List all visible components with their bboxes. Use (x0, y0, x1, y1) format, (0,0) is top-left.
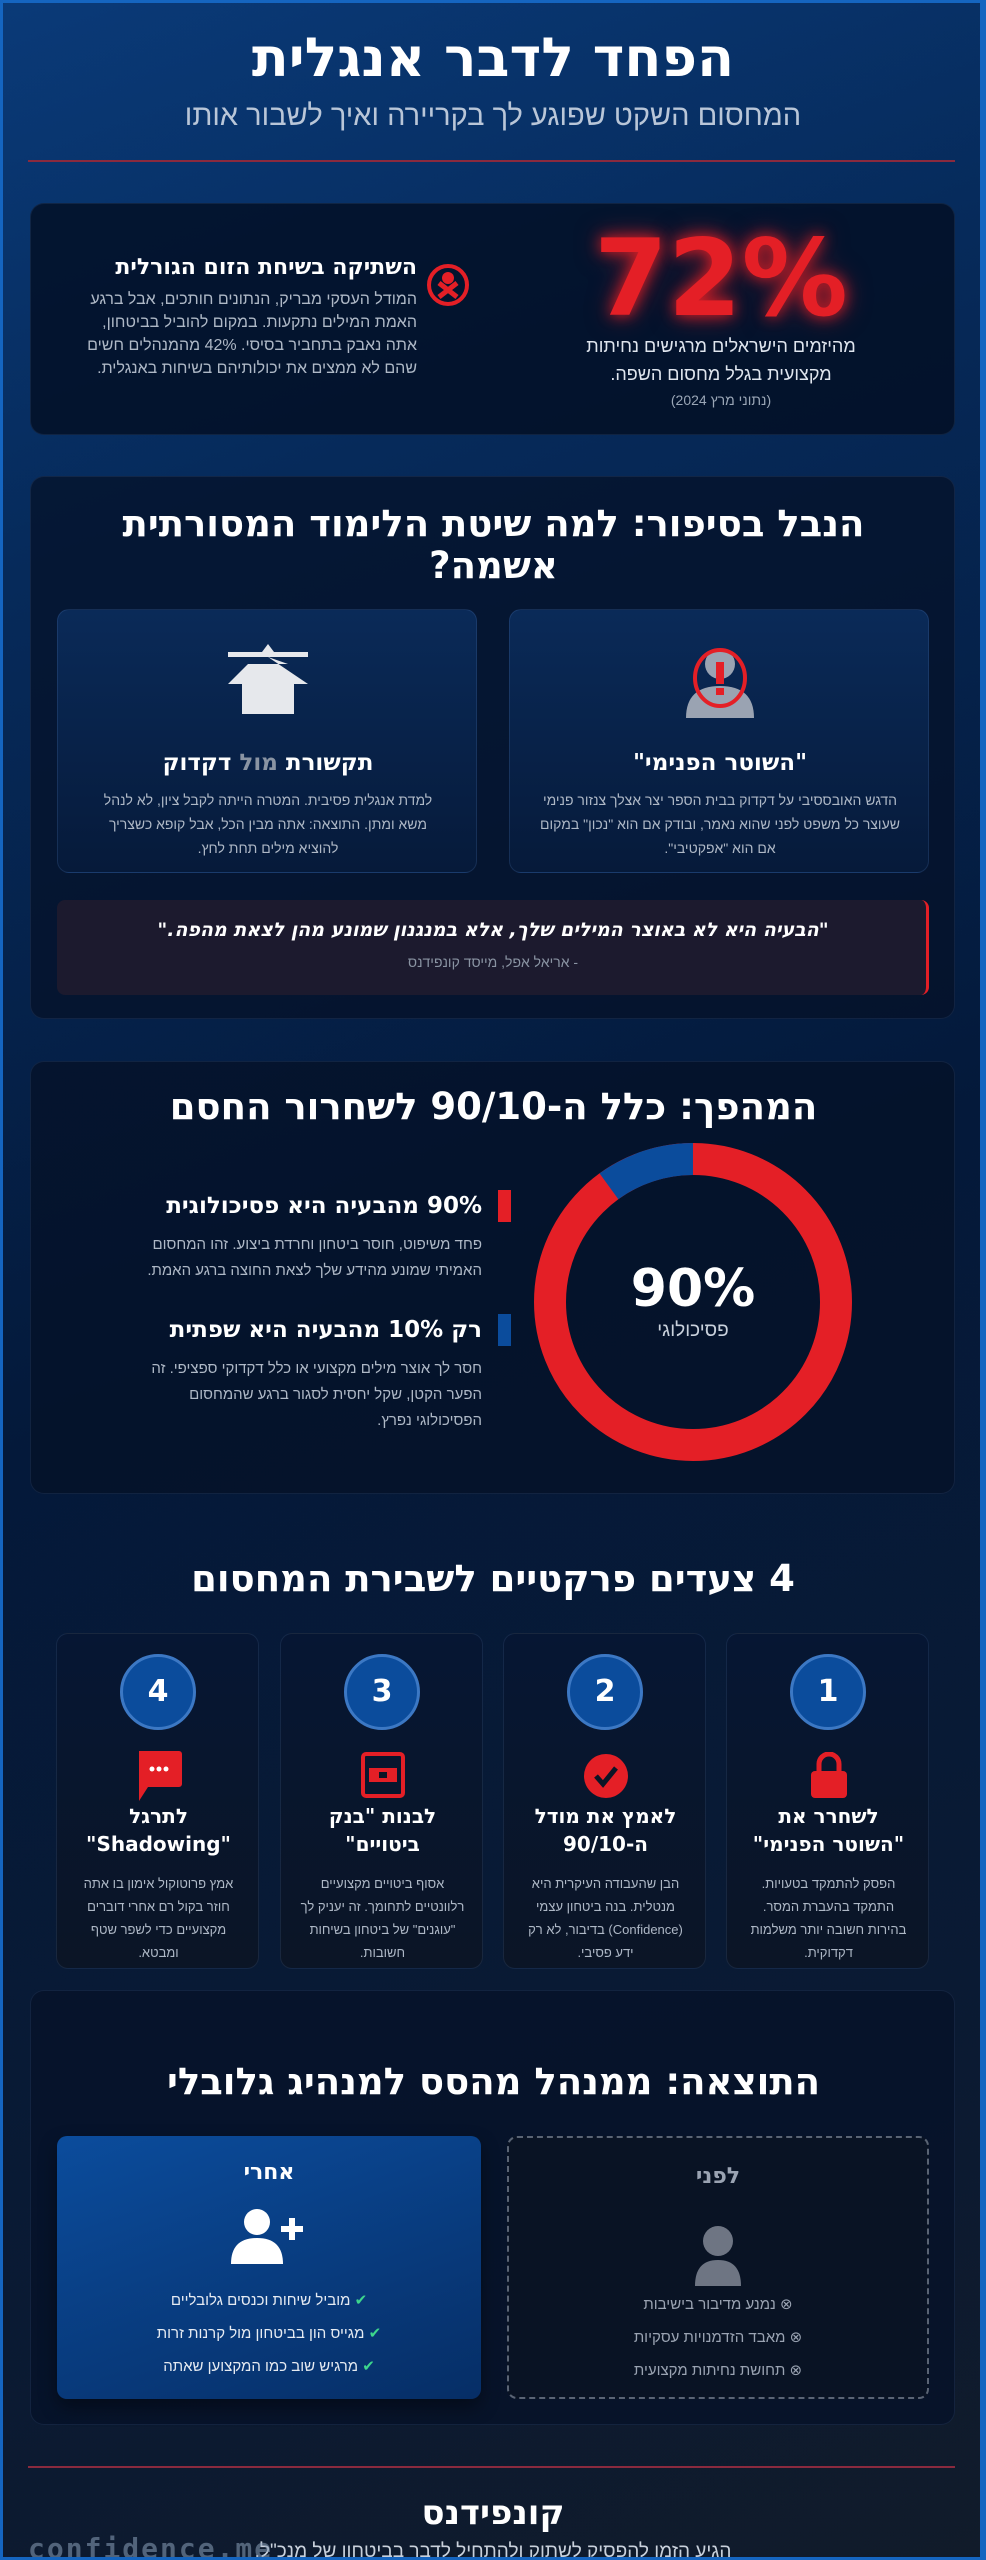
step 3: 3 (372, 1674, 392, 1709)
stat source: (נתוני מרץ 2024) (671, 392, 771, 408)
step 4: אמץ פרוטוקול אימון בו אתה חוזר בקול רם אחרי דוברים מקצועיים כדי לשפר שטף ומבטא. (84, 1876, 233, 1960)
donut chart: פסיכולוגי (657, 1320, 729, 1341)
quote: "הבעיה היא לא באוצר המילים שלך, אלא במנגנון שמונע מהן לצאת מהפה." (157, 919, 829, 941)
step 4 (56, 1633, 259, 1969)
step 2: 2 (595, 1674, 615, 1709)
step 3: לבנות "בנק (329, 1804, 436, 1828)
before list: ⊗ מאבד הזדמנויות עסקיות (634, 2329, 802, 2346)
card text: הדגש האובססיבי על דקדוק בבית הספר יצר אצלך צנזור פנימי שעוצר כל משפט לפני שהוא נאמר, ובודק אם הוא "נכון" במקום אם הוא "אפקטיבי". (540, 792, 900, 856)
before list: ⊗ נמנע מדיבור בישיבות (643, 2296, 793, 2313)
card title: "השוטר הפנימי" (633, 750, 807, 776)
stat description (586, 336, 856, 384)
text: zoom silence: המודל העסקי מבריק, הנתונים חותכים, אבל ברגע האמת המילים נתקעות. במקום להוביל בביטחון, אתה נאבק בתחביר בסיסי. 42% מהמנהלים חשים שהם לא ממצים את יכולותיהם בשיחות באנגלית. (87, 291, 417, 377)
heading: הנבל בסיפור: למה שיטת הלימוד המסורתית אשמה? (123, 502, 864, 587)
before list (634, 2296, 802, 2379)
step 1: הפסק להתמקד בטעויות. התמקד בהעברת המסר. בהירות חשובה יותר משלמות דקדוקית. (751, 1876, 906, 1960)
panel: stat (30, 203, 955, 435)
step 3: ביטויים" (345, 1832, 420, 1856)
card: inner cop (509, 609, 929, 873)
icon: gray person (695, 2226, 741, 2286)
step 1: "השוטר הפנימי" (753, 1832, 904, 1856)
step 2: לאמץ את מודל (535, 1804, 676, 1828)
card title: תקשורת מול דקדוק (163, 750, 373, 776)
step 4: לתרגל (129, 1804, 188, 1828)
legend: linguistic (151, 1314, 511, 1429)
box: before: לפני (696, 2164, 740, 2189)
text: zoom silence: השתיקה בשיחת הזום הגורלית (115, 255, 417, 280)
heading: המהפך: כלל ה-90/10 לשחרור החסם (170, 1085, 817, 1128)
box: before (507, 2136, 929, 2399)
icon: person plus (231, 2209, 303, 2264)
step 3 (280, 1633, 483, 1969)
panel: root cause (30, 476, 955, 1019)
step 4: 4 (148, 1674, 168, 1709)
after list: ✔ מגייס הון בביטחון מול קרנות זרות (157, 2325, 381, 2342)
donut chart: 90% (631, 1259, 755, 1319)
icon: silenced person (427, 264, 469, 306)
after list: ✔ מרגיש שוב כמו המקצוען שאתה (163, 2358, 375, 2375)
icon: lock (811, 1752, 847, 1798)
step 2 (503, 1633, 706, 1969)
quote: - אריאל אפל, מייסד קונפידנס (408, 954, 578, 970)
step 3: אסוף ביטויים מקצועיים רלוונטיים לתחומך. זה יעניק לך "עוגנים" של ביטחון בשיחות חשובות. (301, 1876, 464, 1960)
panel: 90/10 rule (30, 1061, 955, 1494)
footer brand: קונפידנס (422, 2493, 564, 2533)
icon: check (584, 1754, 628, 1798)
icon: phrase bank (361, 1752, 405, 1798)
step 4: "Shadowing" (86, 1832, 231, 1856)
title: הפחד לדבר אנגלית (252, 26, 734, 89)
subtitle: המחסום השקט שפוגע לך בקריירה ואיך לשבור אותו (185, 100, 801, 132)
step 1 (726, 1633, 929, 1969)
legend: psychological: פחד משיפוט, חוסר ביטחון וחרדת ביצוע. זהו המחסום האמיתי שמונע מהידע שלך לצאת החוצה ברגע האמת. (147, 1236, 482, 1279)
stat description: מהיזמים הישראלים מרגישים נחיתות (586, 336, 856, 356)
legend: psychological: 90% מהבעיה היא פסיכולוגית (166, 1193, 482, 1219)
stat description: מקצועית בגלל מחסום השפה. (610, 364, 832, 384)
box: after: אחרי (244, 2160, 294, 2185)
step 1: לשחרר את (778, 1804, 879, 1828)
panel: result (30, 1990, 955, 2425)
before list: ⊗ תחושת נחיתות מקצועית (634, 2362, 802, 2379)
heading: 4 steps: 4 צעדים פרקטיים לשבירת המחסום (191, 1557, 795, 1600)
donut chart (534, 1143, 852, 1461)
box: after (57, 2136, 481, 2399)
after list (157, 2292, 381, 2375)
quote (57, 900, 929, 995)
legend: linguistic: חסר לך אוצר מילים מקצועי או כלל דקדוקי ספציפי. זה הפער הקטן, שקל יחסית לסגור ברגע שהמחסום הפסיכולוגי נפרץ. (151, 1360, 482, 1429)
legend: psychological (147, 1190, 511, 1279)
heading: התוצאה: ממנהל מהסס למנהיג גלובלי (167, 2060, 820, 2103)
step 2: ה-90/10 (563, 1832, 648, 1856)
card text: למדת אנגלית פסיבית. המטרה הייתה לקבל ציון, לא לנהל משא ומתן. התוצאה: אתה מבין הכל, אבל קופא כשצריך להוציא מילים תחת לחץ. (104, 792, 432, 856)
card: communication vs grammar (57, 609, 477, 873)
step 2: הבן שהעבודה העיקרית היא מנטלית. בנה ביטחון עצמי (Confidence) בדיבור, לא רק ידע פסיבי. (528, 1876, 683, 1960)
after list: ✔ מוביל שיחות וכנסים גלובליים (171, 2292, 367, 2309)
icon: speech bubble (139, 1751, 182, 1801)
legend: linguistic: רק 10% מהבעיה היא שפתית (170, 1317, 482, 1343)
stat 72%: 72% (594, 217, 848, 340)
step 1: 1 (818, 1674, 838, 1709)
icon: inner cop (686, 648, 754, 718)
icon: scale (228, 644, 308, 714)
